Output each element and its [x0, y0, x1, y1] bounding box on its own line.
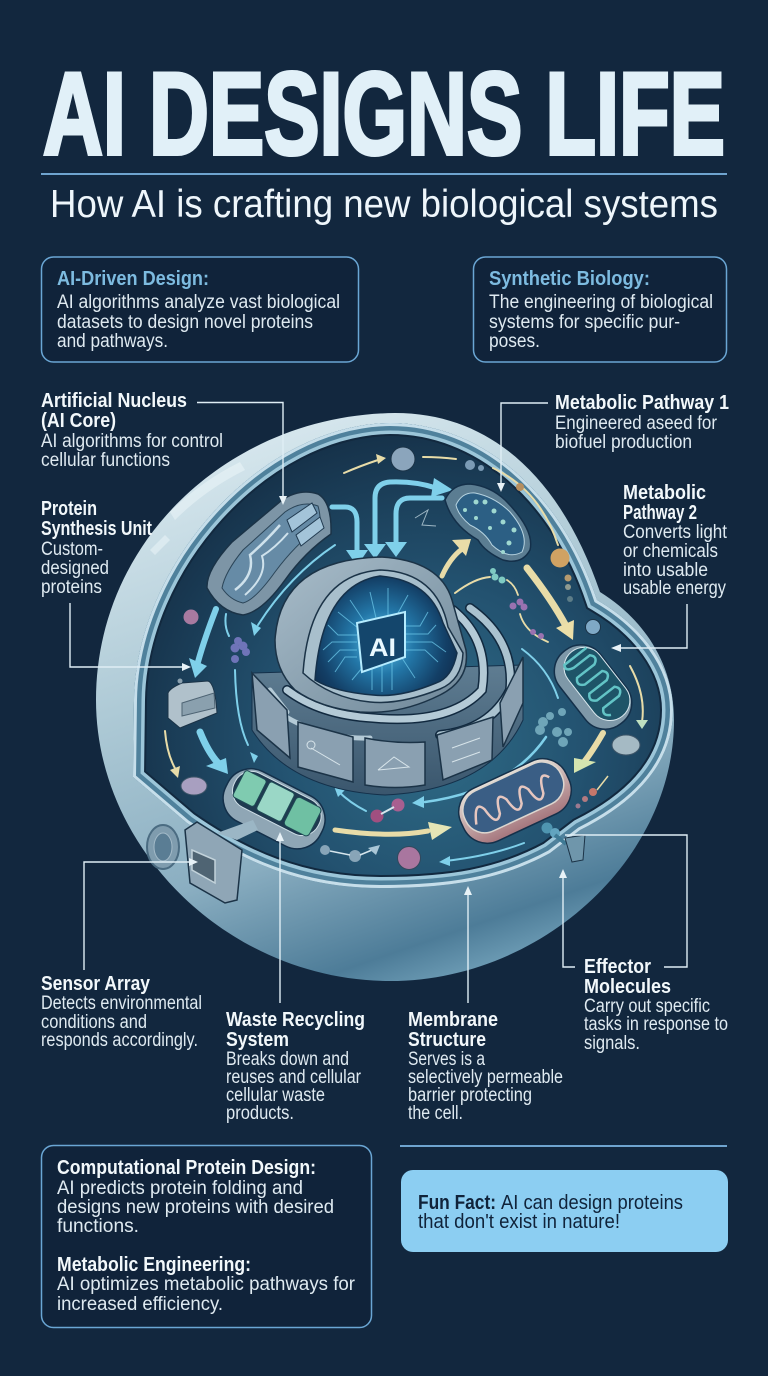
label: protein synthesis unit	[41, 497, 152, 598]
panel: AI-driven design: AI algorithms analyze vast biological	[57, 292, 340, 313]
label: artificial nucleus: Artificial Nucleus	[41, 389, 187, 412]
label: protein synthesis unit: proteins	[41, 577, 102, 598]
leader: protein synthesis unit	[70, 603, 191, 671]
panel: synthetic biology: poses.	[489, 331, 540, 352]
label: waste recycling system: Waste Recycling	[226, 1008, 365, 1031]
label: effector molecules: signals.	[584, 1033, 640, 1054]
panel: computational protein design and metabolic engineering: functions.	[57, 1216, 139, 1237]
cell illustration	[96, 413, 674, 981]
subtitle: How AI is crafting new biological systems	[50, 183, 718, 226]
label: metabolic pathway 2	[623, 481, 728, 599]
label: membrane structure: Membrane	[408, 1008, 498, 1031]
label: protein synthesis unit: Protein	[41, 497, 97, 520]
organelle: waste recycling capsule	[214, 760, 334, 858]
panel: computational protein design and metabolic engineering: AI optimizes metabolic pathways for	[57, 1274, 356, 1295]
organelle: protein synthesis capsule	[207, 492, 331, 615]
label: effector molecules: tasks in response to	[584, 1014, 728, 1035]
label: waste recycling system: Breaks down and	[226, 1049, 349, 1070]
label: membrane structure: barrier protecting	[408, 1085, 532, 1106]
label: waste recycling system: cellular waste	[226, 1085, 325, 1106]
organelle: teal mitochondrion	[544, 635, 642, 739]
organelle: protein synthesis unit	[168, 678, 217, 728]
leader: artificial nucleus	[197, 402, 287, 505]
leader: waste recycling	[276, 832, 284, 1003]
arrows	[165, 454, 648, 866]
panel: AI-driven design: datasets to design novel proteins	[57, 312, 313, 333]
callout: fun fact: AI can design proteins	[501, 1192, 683, 1214]
label: artificial nucleus: AI algorithms for control	[41, 431, 223, 452]
leader: metabolic pathway 1	[497, 403, 548, 492]
label: protein synthesis unit: designed	[41, 558, 109, 579]
panel: computational protein design and metabolic engineering: Metabolic Engineering:	[57, 1253, 251, 1276]
label: artificial nucleus: (AI Core)	[41, 409, 116, 432]
label: membrane structure: selectively permeable	[408, 1067, 563, 1088]
panel: AI-driven design	[42, 257, 358, 362]
label: sensor array: Detects environmental	[41, 993, 202, 1014]
organelle: metabolic pathway bean	[445, 484, 531, 561]
label: sensor array	[41, 972, 202, 1051]
AI chip: AI	[369, 634, 396, 662]
organelle: red mitochondrion	[450, 750, 580, 852]
label: sensor array: conditions and	[41, 1012, 147, 1033]
label: artificial nucleus: cellular functions	[41, 450, 170, 471]
circuit traces	[323, 588, 446, 692]
label: effector molecules: Carry out specific	[584, 996, 710, 1017]
label: metabolic pathway 2: into usable	[623, 560, 708, 581]
label: sensor array: Sensor Array	[41, 972, 151, 995]
panel: computational protein design and metabolic engineering: increased efficiency.	[57, 1294, 223, 1315]
label: metabolic pathway 1: Engineered aseed for	[555, 413, 718, 434]
leader: effector	[559, 835, 687, 967]
effector molecule and membrane gate	[542, 822, 585, 862]
leader: membrane	[464, 886, 472, 1003]
cell interior floor	[133, 423, 673, 888]
label: waste recycling system	[226, 1008, 365, 1124]
label: protein synthesis unit: Synthesis Unit	[41, 517, 152, 540]
leader: sensor array	[84, 858, 198, 970]
label: sensor array: responds accordingly.	[41, 1030, 198, 1051]
label: metabolic pathway 1: biofuel production	[555, 432, 692, 453]
label: waste recycling system: reuses and cellular	[226, 1067, 362, 1088]
callout: fun fact	[401, 1170, 728, 1252]
panel: synthetic biology	[474, 257, 726, 362]
panel: computational protein design and metabolic engineering: designs new proteins with desired	[57, 1197, 334, 1218]
highlights	[150, 462, 245, 555]
nucleus platform rings	[252, 608, 523, 795]
label: metabolic pathway 1: Metabolic Pathway 1	[555, 391, 729, 414]
callout: fun fact: that don't exist in nature!	[418, 1211, 620, 1233]
label: membrane structure: Structure	[408, 1028, 486, 1051]
panel: computational protein design and metabolic engineering: AI predicts protein folding and	[57, 1178, 303, 1199]
label: membrane structure: Serves is a	[408, 1049, 485, 1070]
AI chip	[357, 612, 405, 672]
label: waste recycling system: products.	[226, 1103, 294, 1124]
panel: AI-driven design: and pathways.	[57, 331, 168, 352]
panel: computational protein design and metabolic engineering: Computational Protein Design:	[57, 1156, 316, 1179]
panel: computational protein design and metabolic engineering	[42, 1146, 372, 1328]
panel: synthetic biology: The engineering of biological	[489, 292, 713, 313]
label: effector molecules	[584, 955, 728, 1054]
nucleus dome with AI chip	[275, 557, 466, 712]
label: waste recycling system: System	[226, 1028, 289, 1051]
nucleus panels	[252, 657, 523, 788]
label: metabolic pathway 2: Pathway 2	[623, 501, 697, 524]
molecules	[181, 447, 640, 870]
label: membrane structure	[408, 1008, 563, 1124]
callout: fun fact: Fun Fact:	[418, 1192, 496, 1214]
label: metabolic pathway 2: Converts light	[623, 522, 728, 543]
outer membrane sphere	[96, 413, 674, 981]
label: metabolic pathway 2: Metabolic	[623, 481, 706, 504]
panel: synthetic biology: Synthetic Biology:	[489, 267, 650, 290]
label: metabolic pathway 2: usable energy	[623, 578, 726, 599]
label: metabolic pathway 2: or chemicals	[623, 541, 718, 562]
sensor array	[147, 820, 258, 903]
panel: synthetic biology: systems for specific pur-	[489, 312, 680, 333]
label: effector molecules: Molecules	[584, 975, 671, 998]
label: membrane structure: the cell.	[408, 1103, 463, 1124]
label: metabolic pathway 1	[555, 391, 729, 453]
panel: AI-driven design: AI-Driven Design:	[57, 267, 209, 290]
label: artificial nucleus	[41, 389, 223, 471]
label: effector molecules: Effector	[584, 955, 651, 978]
label: protein synthesis unit: Custom-	[41, 539, 103, 560]
leader: metabolic pathway 2	[611, 604, 687, 652]
